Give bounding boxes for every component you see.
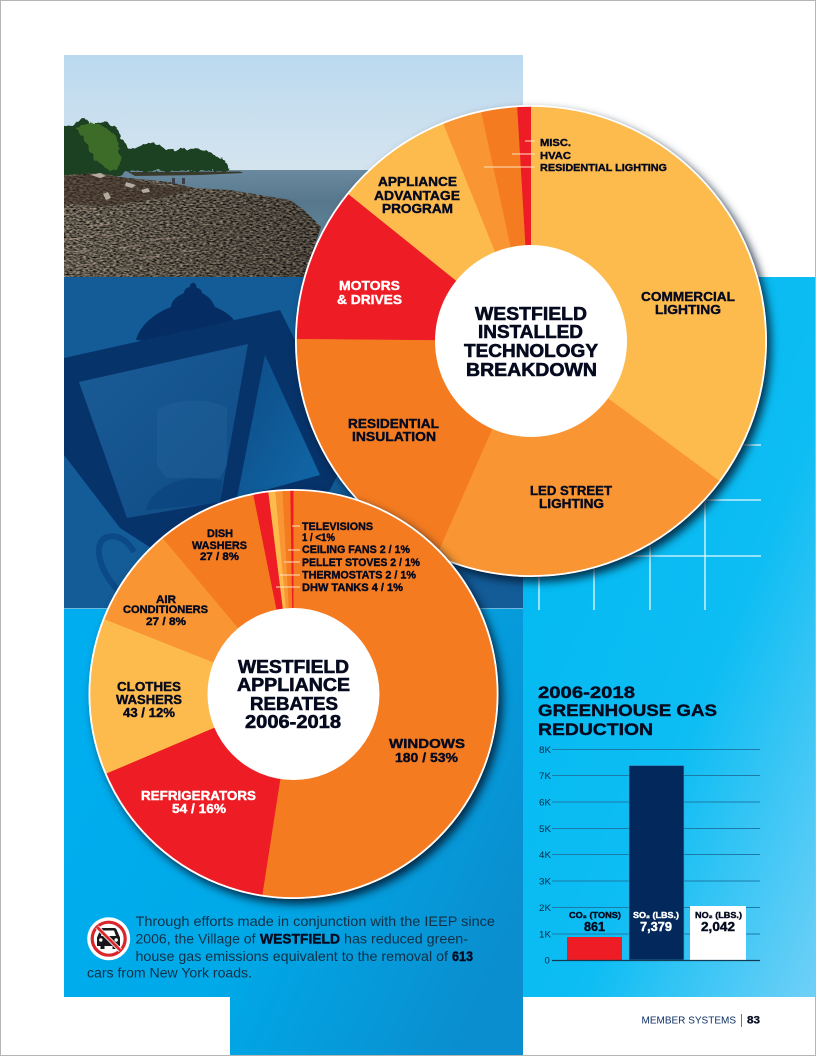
photo: lakeshore — [60, 55, 523, 277]
heading: appliance rebates: WESTFIELD — [238, 656, 349, 677]
text block: emissions summary: house gas emissions equivalent to the removal of — [136, 949, 448, 964]
label: windows — [389, 736, 465, 765]
bar label: NO2: NO₂ (LBS.) — [695, 910, 742, 920]
callout labels: small appliance categories: DHW TANKS 4 / 1% — [302, 582, 403, 594]
callout labels: small appliance categories: 1 / <1% — [302, 532, 335, 544]
callout labels: misc, HVAC, residential lighting: MISC. — [540, 137, 571, 149]
bar label: CO2 — [569, 910, 621, 934]
y axis labels: 0 — [544, 956, 550, 966]
y axis labels: 3K — [539, 876, 552, 888]
label: windows: WINDOWS — [389, 736, 465, 751]
text block: emissions summary: 613 — [452, 949, 473, 964]
callout labels: misc, HVAC, residential lighting — [484, 137, 667, 174]
y axis labels: 2K — [539, 903, 552, 914]
label: air conditioners: 27 / 8% — [146, 616, 186, 628]
label: motors and drives: & DRIVES — [337, 292, 402, 307]
bulb inside lantern — [226, 462, 227, 466]
label: dish washers: DISH — [207, 528, 233, 540]
baseline — [552, 960, 760, 962]
bar chart: greenhouse gas reduction — [538, 683, 760, 966]
photo: street lantern duotone — [64, 277, 523, 609]
bar label: SO2: 7,379 — [640, 920, 672, 934]
label: motors and drives — [337, 278, 402, 307]
y axis labels: 6K — [539, 798, 552, 808]
callout labels: misc, HVAC, residential lighting: RESIDENTIAL LIGHTING — [540, 162, 667, 174]
y axis labels: 1K — [539, 930, 552, 940]
label: appliance advantage program — [374, 174, 460, 216]
panel: left blue background — [64, 609, 523, 1056]
center hole — [435, 245, 627, 437]
pie base and shadow — [90, 490, 498, 898]
y axis gridlines — [552, 750, 760, 934]
footer: section name and page number: 83 — [747, 1014, 760, 1026]
icon: no cars sign — [87, 917, 130, 960]
chart heading: 2006-2018 — [538, 683, 635, 702]
label: refrigerators: REFRIGERATORS — [141, 788, 256, 803]
text block: emissions summary: 2006, the Village of — [136, 932, 256, 947]
bar: NO2 — [690, 906, 746, 960]
text block: emissions summary: has reduced green- — [344, 932, 468, 947]
label: appliance advantage program: APPLIANCE — [378, 174, 457, 189]
callout labels: small appliance categories: PELLET STOVES 2 / 1% — [302, 557, 420, 569]
footer: section name and page number: MEMBER SYSTEMS — [642, 1014, 736, 1026]
heading: appliance rebates: REBATES — [250, 693, 338, 714]
slice: air conditioners — [104, 538, 294, 694]
white grid lines on blue — [523, 420, 761, 610]
y axis labels — [539, 745, 552, 966]
pie outline — [90, 490, 498, 898]
callout labels: small appliance categories: CEILING FANS 2 / 1% — [302, 544, 410, 556]
bar: CO2 — [567, 937, 622, 960]
label: LED street lighting: LIGHTING — [539, 496, 604, 511]
right pane — [237, 355, 320, 498]
label: air conditioners: AIR — [156, 594, 176, 606]
label: residential insulation — [348, 416, 439, 444]
heading: appliance rebates: 2006-2018 — [245, 711, 341, 732]
label: clothes washers — [116, 679, 182, 720]
text block: emissions summary — [87, 914, 495, 981]
label: commercial lighting: COMMERCIAL — [641, 289, 735, 304]
people on the shore — [172, 178, 185, 184]
y axis labels: 8K — [539, 745, 552, 756]
pie outline — [296, 106, 766, 576]
chart heading: REDUCTION — [538, 720, 653, 739]
y axis labels: 7K — [539, 771, 552, 782]
slice: windows — [262, 490, 497, 898]
heading: installed technology breakdown: WESTFIELD — [475, 303, 587, 324]
heading: installed technology breakdown: BREAKDOWN — [466, 359, 597, 380]
slice: pellet stoves — [275, 490, 294, 694]
callout labels: small appliance categories — [276, 521, 420, 594]
y axis labels: 4K — [539, 850, 552, 861]
label: appliance advantage program: ADVANTAGE — [374, 188, 460, 203]
label: residential insulation: RESIDENTIAL — [348, 416, 439, 431]
slice: thermostats — [268, 491, 294, 694]
label: residential insulation: INSULATION — [352, 429, 436, 444]
callout labels: small appliance categories: TELEVISIONS — [302, 521, 373, 533]
bar label: SO2: SO₂ (LBS.) — [633, 910, 679, 920]
label: dish washers: 27 / 8% — [200, 551, 239, 563]
heading: installed technology breakdown: INSTALLED — [478, 321, 583, 342]
label: windows: 180 / 53% — [395, 750, 458, 765]
slice: refrigerators — [106, 694, 294, 896]
label: appliance advantage program: PROGRAM — [382, 201, 453, 216]
label: LED street lighting — [530, 483, 612, 511]
heading: installed technology breakdown: TECHNOLOGY — [464, 340, 599, 361]
heading: installed technology breakdown — [464, 303, 599, 380]
lantern cap — [136, 283, 234, 345]
chart heading: GREENHOUSE GAS — [538, 701, 717, 720]
debris streaks on beach — [66, 224, 196, 266]
label: clothes washers: WASHERS — [116, 692, 182, 707]
label: motors and drives: MOTORS — [339, 278, 400, 293]
bar label: SO2 — [633, 910, 679, 934]
label: clothes washers: 43 / 12% — [123, 705, 175, 720]
heading: appliance rebates — [237, 656, 350, 732]
slice: LED street lighting — [436, 341, 720, 576]
slice: dish washers — [162, 494, 294, 694]
slice: residential lighting — [517, 106, 531, 341]
text block: emissions summary: cars from New York roads. — [87, 966, 252, 981]
text block: emissions summary: Through efforts made in conjunction with the IEEP since — [136, 914, 495, 929]
lantern frame — [64, 310, 350, 560]
chart heading — [538, 683, 717, 739]
text block: emissions summary: WESTFIELD — [260, 932, 340, 947]
slice: DHW tanks — [253, 492, 294, 694]
label: refrigerators: 54 / 16% — [172, 801, 226, 816]
pie chart: Westfield appliance rebates — [90, 490, 498, 898]
slice: commercial lighting — [531, 106, 766, 481]
slice: ceiling fans — [282, 490, 294, 694]
slice: televisions — [290, 490, 294, 694]
center hole — [208, 608, 380, 780]
bar: SO2 — [629, 766, 684, 960]
y axis labels: 5K — [539, 824, 552, 835]
label: commercial lighting — [641, 289, 735, 317]
lantern handle — [99, 536, 134, 590]
label: air conditioners — [123, 594, 208, 628]
label: dish washers — [192, 528, 247, 563]
heading: appliance rebates: APPLIANCE — [237, 674, 350, 695]
slice: misc — [443, 111, 531, 341]
label: dish washers: WASHERS — [192, 540, 247, 552]
slice: residential insulation — [296, 339, 531, 556]
bar label: NO2: 2,042 — [701, 920, 735, 934]
slice: HVAC — [481, 106, 531, 341]
pie chart: Westfield installed technology breakdown — [296, 106, 766, 576]
pie base and shadow — [296, 106, 766, 576]
label: air conditioners: CONDITIONERS — [123, 604, 208, 616]
rocks on the shore — [91, 173, 150, 200]
panel: right blue background — [523, 277, 815, 997]
bar label: NO2 — [695, 910, 742, 934]
slice: appliance advantage program — [348, 123, 531, 341]
label: clothes washers: CLOTHES — [117, 679, 181, 694]
label: refrigerators — [141, 788, 256, 816]
lantern glass — [79, 344, 248, 518]
label: LED street lighting: LED STREET — [530, 483, 612, 498]
callout labels: misc, HVAC, residential lighting: HVAC — [540, 150, 571, 162]
callout labels: small appliance categories: THERMOSTATS 2 / 1% — [302, 570, 416, 582]
bar label: CO2: CO₂ (TONS) — [569, 910, 621, 920]
slice: motors and drives — [296, 194, 531, 341]
slice: clothes washers — [90, 619, 294, 774]
label: commercial lighting: LIGHTING — [655, 302, 721, 317]
bar label: CO2: 861 — [584, 920, 605, 934]
